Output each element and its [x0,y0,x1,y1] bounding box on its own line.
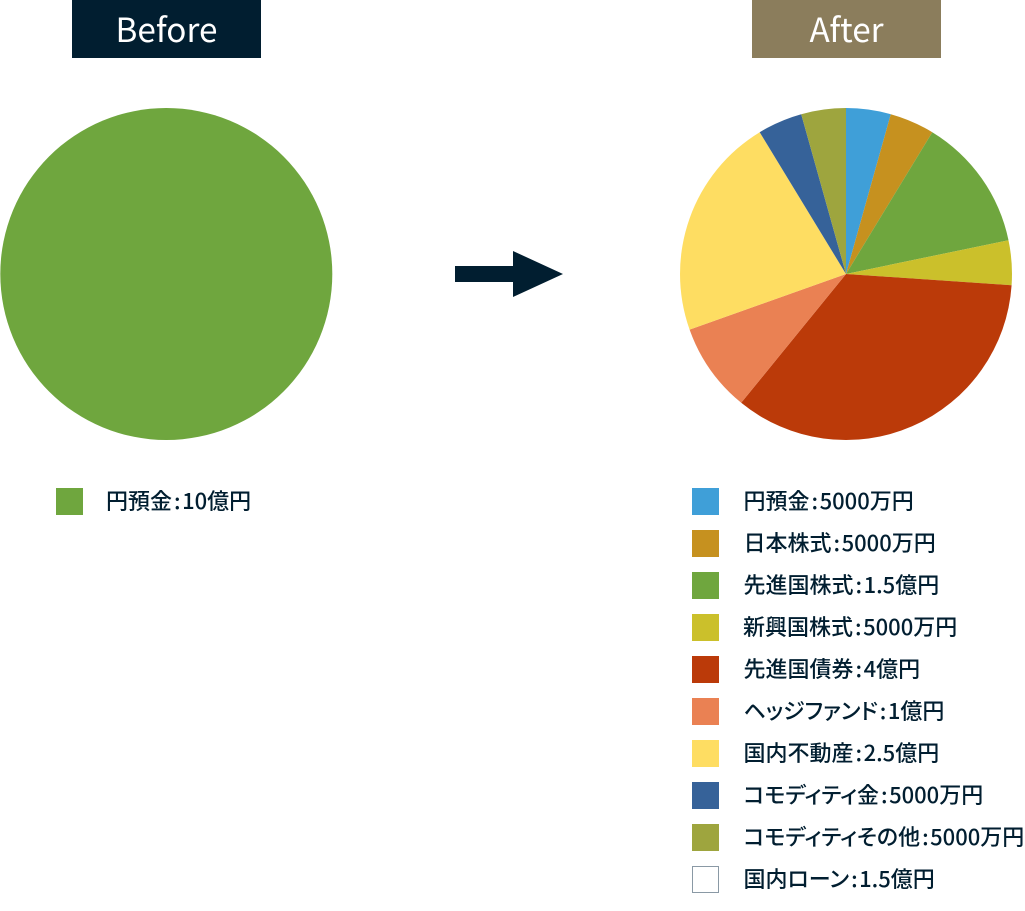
legend: before: 円預金:10億円 [106,484,251,516]
legend: after: コモディティ金:5000万円 [744,778,983,810]
legend: after: 先進国株式:1.5億円 [744,568,939,600]
legend: after: ヘッジファンド:1億円 [744,694,944,726]
legend: after: 日本株式:5000万円 [744,526,936,558]
legend: after [692,484,1024,894]
heading: Before: Before [116,3,217,52]
arrow [455,251,563,297]
legend: after: 国内ローン:1.5億円 [744,862,935,894]
legend: after: コモディティその他:5000万円 [744,820,1024,852]
legend: after: 円預金:5000万円 [744,484,914,516]
legend: after: 新興国株式:5000万円 [743,610,957,642]
legend: after: 先進国債券:4億円 [744,652,920,684]
legend: after: 国内不動産:2.5億円 [744,736,939,768]
pie chart: after [680,108,1012,440]
pie chart: before [0,108,332,440]
heading: After: After [809,3,884,52]
heading: After [752,0,941,58]
heading: Before [72,0,261,58]
